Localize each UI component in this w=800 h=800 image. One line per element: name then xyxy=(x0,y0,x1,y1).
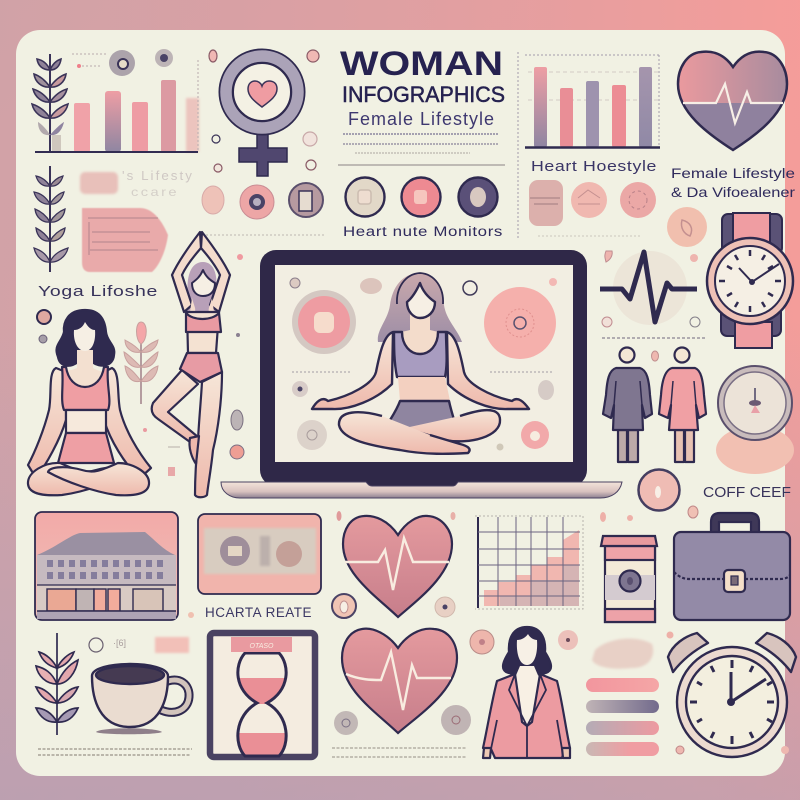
faded text: lifestyle note xyxy=(80,168,194,199)
screen icon: left pink target xyxy=(292,290,356,354)
screen small icons xyxy=(290,278,557,450)
title xyxy=(340,45,505,129)
screen icon: right pink target xyxy=(484,287,556,359)
figure: seated woman xyxy=(28,310,151,495)
icon: two people xyxy=(603,348,706,462)
icons: pink blobs xyxy=(529,180,656,236)
icon: building picture xyxy=(35,512,178,620)
bar chart: top right xyxy=(518,52,660,240)
faded text: lifestyle note: ccare xyxy=(131,185,179,199)
icon: briefcase xyxy=(674,513,790,620)
decorative dots: yoga column xyxy=(37,254,244,476)
title: INFOGRAPHICS xyxy=(342,82,505,107)
icon: small ring button xyxy=(638,470,680,510)
title: WOMAN xyxy=(340,45,503,83)
icon: pink circle xyxy=(667,207,707,247)
laptop frame xyxy=(260,250,587,486)
tiny rule lines xyxy=(332,748,467,757)
icon: alarm clock xyxy=(668,633,796,757)
icon: hourglass in frame: OTASO xyxy=(250,643,274,650)
midriff xyxy=(398,377,450,401)
crossed legs xyxy=(405,410,500,441)
icon: pink plant xyxy=(124,322,158,404)
panel: picture card xyxy=(198,514,321,594)
icon: coffee cup xyxy=(92,664,189,734)
hair xyxy=(378,273,462,342)
laptop screen xyxy=(275,265,573,462)
decorative small icons near symbol xyxy=(209,50,319,172)
label: female lifestyle xyxy=(671,165,795,200)
icon: laptop with meditating woman xyxy=(221,250,622,498)
icon: round gauge xyxy=(716,366,794,474)
faded text: lifestyle note: 's Lifesty xyxy=(122,168,194,183)
progress bars xyxy=(586,678,659,756)
panel: pink note card xyxy=(82,208,168,272)
chart: heartbeat line xyxy=(600,251,705,338)
label: heart lifestyle: Heart Hoestyle xyxy=(531,159,657,175)
label: female lifestyle: Female Lifestyle xyxy=(671,165,795,181)
figure: woman in blazer xyxy=(483,627,570,758)
icons: monitor circles xyxy=(346,178,498,216)
laptop base xyxy=(221,482,622,498)
top xyxy=(394,332,447,377)
text block: tiny subtitle lines xyxy=(338,134,505,165)
icon: female symbol with heart xyxy=(226,56,298,176)
icon: large heart with pulse xyxy=(675,48,791,153)
small coins xyxy=(188,506,789,754)
label: heart rate: HCARTA REATE xyxy=(205,605,312,620)
faded labels: cup area xyxy=(38,637,192,755)
decorative coins row xyxy=(198,183,326,235)
icon: wristwatch xyxy=(707,213,793,348)
label: heart monitors: Heart nute Monitors xyxy=(343,224,503,239)
chart: growth grid xyxy=(475,516,583,609)
icon: top plant xyxy=(32,54,68,152)
label: yoga lifestyle: Yoga Lifoshe xyxy=(38,284,158,300)
arms xyxy=(312,332,393,409)
label: coffee: COFF CEEF xyxy=(703,484,791,501)
icon: hourglass in frame xyxy=(210,633,315,757)
faded labels: cup area: ·[6] xyxy=(113,638,126,648)
face xyxy=(407,283,435,318)
label: female lifestyle: & Da Vifoealener xyxy=(671,184,795,200)
faint map blob xyxy=(592,639,653,669)
icon: heart with pulse (lower) xyxy=(342,629,457,733)
meditating woman xyxy=(312,273,529,454)
icon: takeaway cup xyxy=(601,536,657,622)
icon: heart with pulse (upper) xyxy=(343,516,452,617)
bar chart: top left xyxy=(35,49,199,152)
shorts xyxy=(380,401,460,452)
neck and chest xyxy=(393,312,447,378)
icon: plant with pink leaves xyxy=(36,633,78,735)
icon: second plant xyxy=(34,166,68,272)
title: Female Lifestyle xyxy=(348,109,495,129)
figure: standing yoga woman xyxy=(152,232,230,497)
